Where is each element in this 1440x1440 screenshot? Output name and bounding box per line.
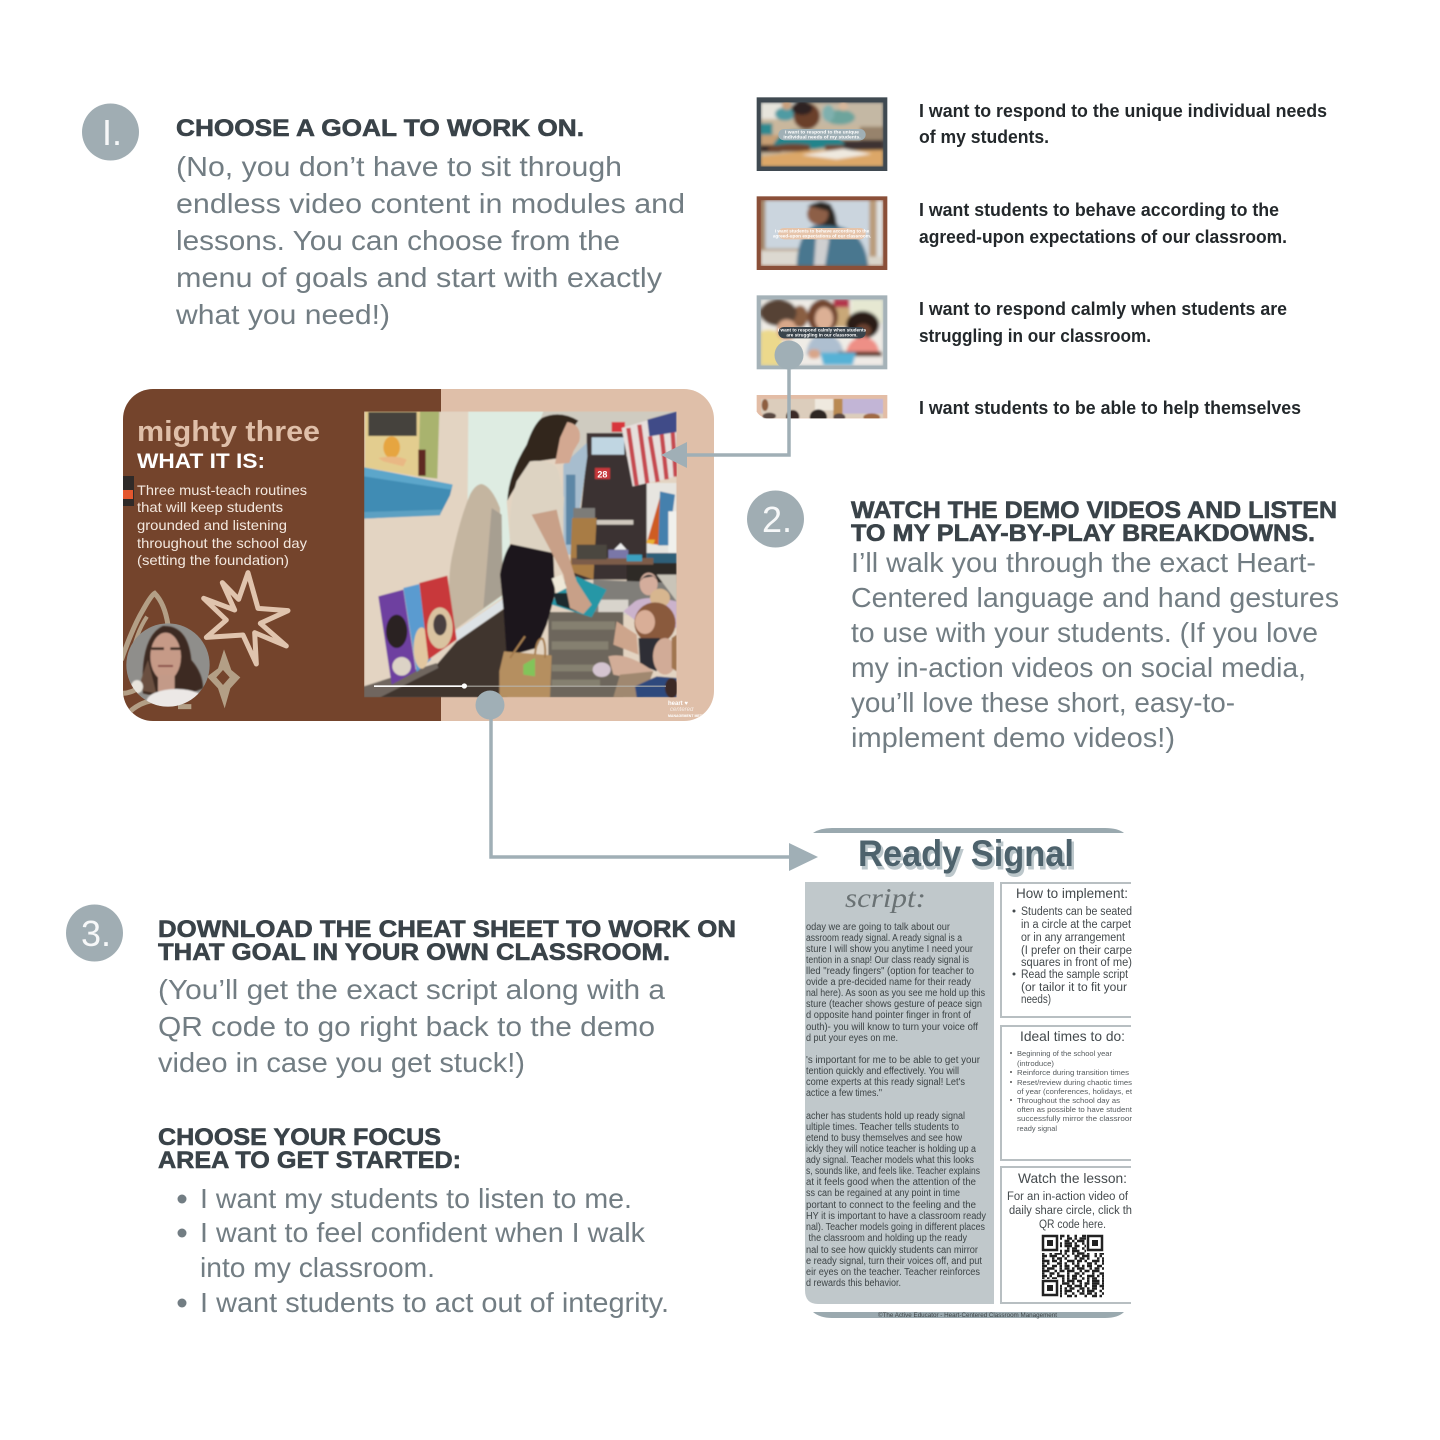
step 1 badge: I. <box>102 112 122 153</box>
box: ideal times: Ideal times to do: <box>1020 1028 1125 1044</box>
script panel: oday we are going to talk about our <box>806 922 951 933</box>
script panel: etend to busy themselves and see how <box>806 1133 963 1144</box>
wall <box>364 411 677 697</box>
step 1 body text: lessons. You can choose from the <box>176 225 620 256</box>
script panel: sture (teacher shows gesture of peace sign <box>806 999 982 1010</box>
script panel: d rewards this behavior. <box>806 1278 901 1289</box>
focus area bullet list: I want students to act out of integrity. <box>200 1287 669 1318</box>
step 1 heading: CHOOSE A GOAL TO WORK ON. <box>176 115 584 142</box>
slide logo <box>668 700 702 717</box>
box: ideal times: ready signal <box>1017 1124 1057 1133</box>
right wall and flags <box>647 483 677 563</box>
box: ideal times: (introduce) <box>1017 1059 1055 1068</box>
focus area bullet list: into my classroom. <box>200 1252 435 1283</box>
box: watch the lesson: QR code here. <box>1039 1219 1106 1231</box>
box: ideal times: Reinforce during transition times <box>1017 1068 1129 1077</box>
slide logo: MANAGEMENT METHOD <box>668 714 710 718</box>
step 3 body text: video in case you get stuck!) <box>158 1047 525 1078</box>
goal captions: agreed-upon expectations of our classroom. <box>919 227 1287 247</box>
box: watch the lesson: Watch the lesson: <box>1018 1170 1127 1186</box>
video slide: mighty three <box>121 389 714 721</box>
goal captions: I want students to behave according to the <box>919 200 1279 220</box>
slide description <box>137 482 307 568</box>
step 2 heading: WATCH THE DEMO VIDEOS AND LISTEN <box>851 497 1337 524</box>
goal captions <box>919 101 1327 418</box>
step 3 body text <box>158 974 665 1078</box>
script panel: actice a few times." <box>806 1088 882 1099</box>
step 2 body text: you’ll love these short, easy-to- <box>851 687 1235 718</box>
script panel: outh)- you will know to turn your voice off <box>806 1022 978 1033</box>
script panel: e ready signal, turn their voices off, and put <box>806 1256 982 1267</box>
gift bag <box>499 651 552 697</box>
script panel: d opposite hand pointer finger in front of <box>806 1010 971 1021</box>
box: how to implement: Students can be seated <box>1021 906 1132 918</box>
box: ideal times: often as possible to have student <box>1017 1105 1133 1114</box>
box: watch the lesson: For an in-action video of <box>1007 1191 1129 1203</box>
step 1 body text: (No, you don’t have to sit through <box>176 151 622 182</box>
script panel: lled "ready fingers" (option for teacher to <box>806 966 974 977</box>
script panel: ovide a pre-decided name for their ready <box>806 977 971 988</box>
box: watch the lesson: daily share circle, click th <box>1009 1205 1132 1217</box>
table and items <box>627 563 677 583</box>
script panel: HY it is important to have a classroom ready <box>806 1211 986 1222</box>
focus area heading <box>158 1124 461 1174</box>
slide description: that will keep students <box>137 499 283 515</box>
step 3 heading: DOWNLOAD THE CHEAT SHEET TO WORK ON <box>158 916 736 943</box>
QR code <box>1041 1234 1105 1298</box>
step 3 body text: (You’ll get the exact script along with a <box>158 974 665 1005</box>
connector arrow: thumbnail to video <box>661 340 804 468</box>
step 2 badge <box>747 490 804 548</box>
connector arrow: video to cheat sheet <box>476 690 818 871</box>
video still: teacher and students <box>364 411 678 698</box>
recording tab <box>123 476 134 506</box>
goal captions: struggling in our classroom. <box>919 326 1151 346</box>
cheat sheet: ready signal <box>805 828 1133 1319</box>
box: ideal times: Reset/review during chaotic times <box>1017 1078 1132 1087</box>
goal menu thumbnails <box>757 97 887 425</box>
slide description: Three must-teach routines <box>137 482 307 498</box>
slide subtitle: WHAT IT IS: <box>137 450 265 473</box>
box: ideal times: Throughout the school day as <box>1017 1096 1120 1105</box>
script panel: ss can be regained at any point in time <box>806 1188 960 1199</box>
script panel: ady signal. Teacher models what this looks <box>806 1155 974 1166</box>
script panel: nal to see how quickly students can mirror <box>806 1245 979 1256</box>
focus area bullet list: I want to feel confident when I walk <box>200 1217 646 1248</box>
script panel: s, sounds like, and feels like. Teacher explains <box>806 1166 980 1177</box>
slide description: (setting the foundation) <box>137 552 289 568</box>
thumbnail: respond calmly: are struggling in our classroom. <box>786 333 858 338</box>
box: watch the lesson <box>1001 1167 1132 1303</box>
box: ideal times: of year (conferences, holidays, et <box>1017 1087 1133 1096</box>
step 2 heading <box>851 497 1337 547</box>
script panel: d put your eyes on me. <box>806 1033 898 1044</box>
step 2 body text <box>851 547 1339 753</box>
box: ideal times: Beginning of the school year <box>1017 1049 1112 1058</box>
step 2 body text: implement demo videos!) <box>851 722 1175 753</box>
sheet footer banner <box>813 1312 1124 1319</box>
focus area bullet list <box>178 1183 669 1318</box>
focus area bullet list: I want my students to listen to me. <box>200 1183 632 1214</box>
box: ideal times: successfully mirror the classroor <box>1017 1114 1133 1123</box>
script panel: acher has students hold up ready signal <box>806 1111 965 1122</box>
focus area heading: CHOOSE YOUR FOCUS <box>158 1124 441 1151</box>
thumbnail: individual needs <box>757 97 887 171</box>
script panel: script: <box>845 883 926 913</box>
picture books <box>378 590 416 685</box>
box: how to implement: squares in front of me) <box>1021 957 1132 969</box>
sheet footer banner: ©The Active Educator - Heart-Centered Classroom Management <box>878 1312 1057 1319</box>
goal captions: I want students to be able to help themselves <box>919 398 1301 418</box>
box: ideal times <box>1001 1026 1133 1160</box>
step 1 body text: endless video content in modules and <box>176 188 685 219</box>
video progress bar <box>374 683 666 689</box>
slide logo: heart ♥ <box>668 701 688 707</box>
box: how to implement <box>1001 883 1132 1017</box>
sheet title: Ready Signal <box>860 836 1076 877</box>
focus area heading: AREA TO GET STARTED: <box>158 1147 461 1174</box>
sheet top banner <box>813 828 1124 833</box>
box: how to implement: needs) <box>1021 994 1051 1006</box>
script panel <box>805 882 994 1304</box>
step 1 body text <box>175 151 685 330</box>
script panel: the classroom and holding up the ready <box>806 1233 967 1244</box>
slide description: throughout the school day <box>137 535 307 551</box>
goal captions: I want to respond calmly when students are <box>919 299 1287 319</box>
step 2 body text: to use with your students. (If you love <box>851 617 1318 648</box>
script panel: tention in a snap! Our class ready signal is <box>806 955 969 966</box>
thumbnail: individual needs: I want to respond to the unique <box>785 129 859 135</box>
thumbnail: expectations <box>757 196 887 270</box>
top books <box>365 411 420 476</box>
script panel: sture I will show you anytime I need your <box>806 944 974 955</box>
script panel: nal). Teacher models going in different places <box>806 1222 985 1233</box>
step 1 body text: menu of goals and start with exactly <box>176 262 662 293</box>
goal captions: of my students. <box>919 127 1049 147</box>
step 3 badge: 3. <box>81 913 111 954</box>
script panel: portant to connect to the feeling and the <box>806 1200 976 1211</box>
script panel: tention quickly and effectively. You will <box>806 1066 959 1077</box>
sheet title: Ready Signal <box>858 833 1074 874</box>
step 1 badge <box>82 104 139 160</box>
slide description: grounded and listening <box>137 517 287 533</box>
slide logo: centered <box>670 707 694 713</box>
script panel: assroom ready signal. A ready signal is a <box>806 933 962 944</box>
box: how to implement: (or tailor it to fit your <box>1021 982 1127 994</box>
ceiling and back wall <box>542 411 677 458</box>
seated students <box>623 598 677 628</box>
slide title: mighty three <box>137 416 320 448</box>
script panel: ultiple times. Teacher tells students to <box>806 1122 959 1133</box>
box: how to implement: or in any arrangement <box>1021 932 1126 944</box>
step 3 heading <box>158 916 736 966</box>
script panel: ickly they will notice teacher is holding up a <box>806 1144 976 1155</box>
step 2 badge: 2. <box>762 499 792 540</box>
script panel: come experts at this ready signal! Let's <box>806 1077 965 1088</box>
doodle decorations <box>121 573 288 717</box>
thumbnail: respond calmly: I want to respond calmly when students <box>778 327 867 332</box>
step 3 heading: THAT GOAL IN YOUR OWN CLASSROOM. <box>158 939 670 966</box>
room number sign: 28 <box>597 469 607 479</box>
thumbnail: respond calmly <box>757 295 887 369</box>
step 2 body text: my in-action videos on social media, <box>851 652 1306 683</box>
step 2 body text: I’ll walk you through the exact Heart- <box>851 547 1316 578</box>
step 1 body text: what you need!) <box>175 299 390 330</box>
whiteboard <box>467 411 543 621</box>
flag <box>622 411 677 486</box>
step 2 body text: Centered language and hand gestures <box>851 582 1339 613</box>
thumbnail: help themselves (cropped) <box>756 395 888 418</box>
box: how to implement: (I prefer on their carpe <box>1021 945 1132 957</box>
lower wall and carpet <box>593 580 677 615</box>
step 3 badge <box>66 904 123 962</box>
goal captions: I want to respond to the unique individual needs <box>919 101 1327 121</box>
script panel: at it feels good when the attention of the <box>806 1177 976 1188</box>
step 2 heading: TO MY PLAY-BY-PLAY BREAKDOWNS. <box>851 520 1315 547</box>
rail and ledge <box>455 596 507 641</box>
box: how to implement: in a circle at the carpet <box>1021 919 1132 931</box>
box: how to implement: Read the sample script <box>1021 969 1129 981</box>
thumbnail: expectations: agreed-upon expectations of our classroom. <box>773 234 871 239</box>
box: how to implement: How to implement: <box>1016 885 1128 901</box>
script panel: 's important for me to be able to get your <box>806 1055 981 1066</box>
script panel: eir eyes on the teacher. Teacher reinforces <box>806 1267 980 1278</box>
thumbnail: individual needs: individual needs of my students. <box>783 135 861 141</box>
teacher <box>507 414 578 501</box>
person shadow <box>449 484 503 630</box>
thumbnail: expectations: I want students to behave according to the <box>775 228 870 233</box>
presenter avatar <box>126 624 210 707</box>
step 3 body text: QR code to go right back to the demo <box>158 1011 655 1042</box>
door and room <box>587 433 627 458</box>
wall shelf <box>364 476 453 514</box>
script panel: nal here). As soon as you see me hold up this <box>806 988 985 999</box>
